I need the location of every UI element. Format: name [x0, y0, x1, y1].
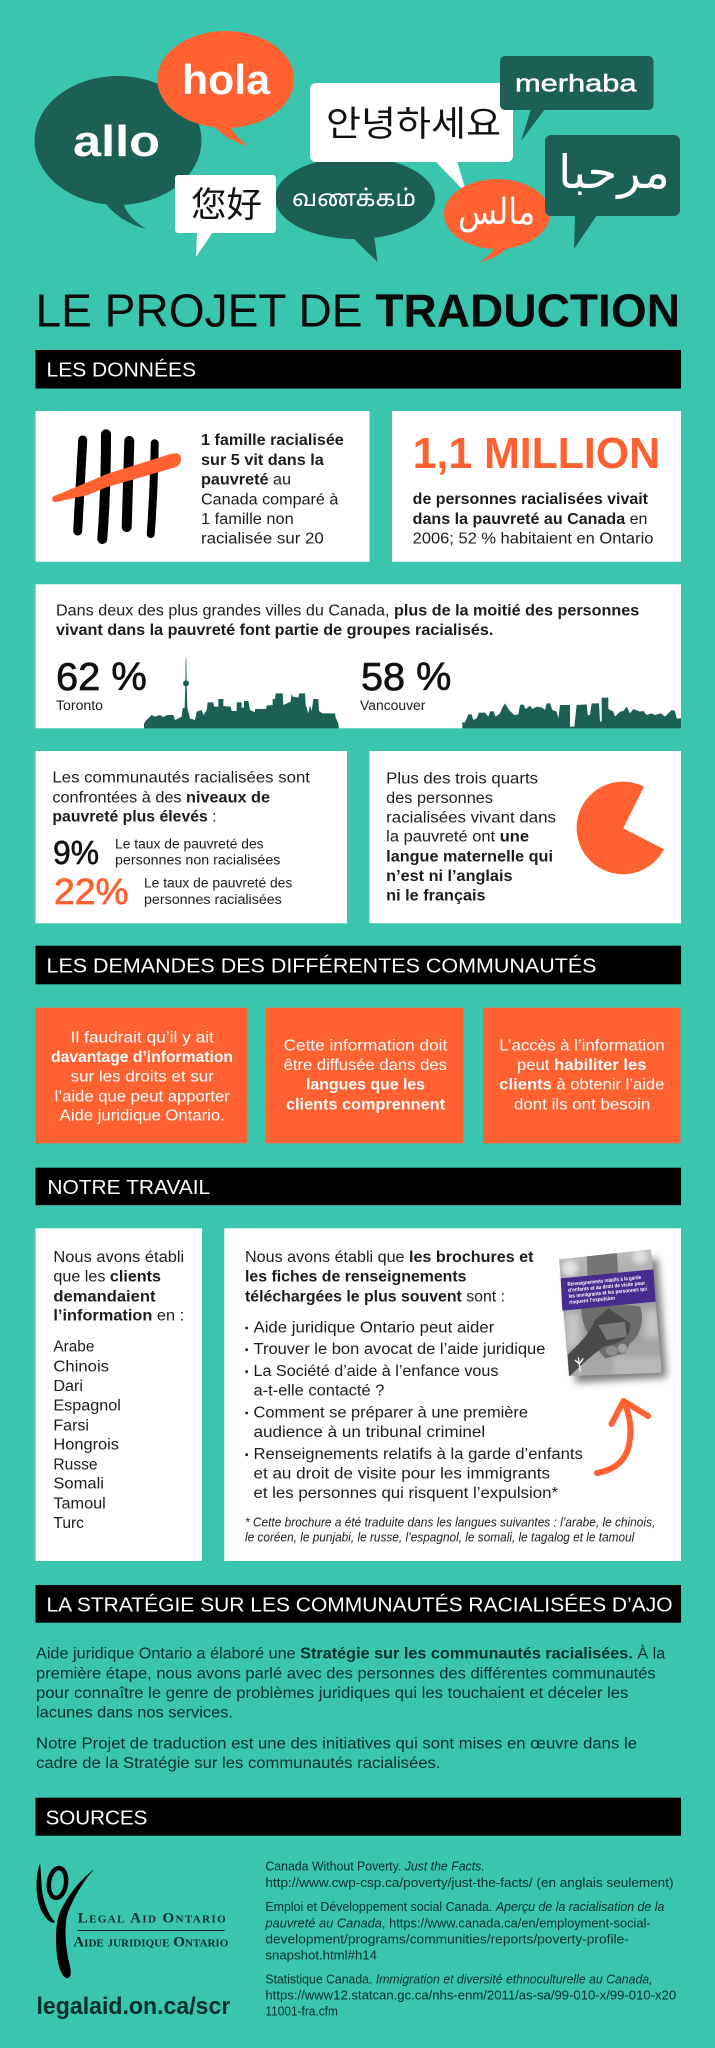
source 2: pauvreté au Canada , https://www.canada.ca/en/employment-social- [264, 1916, 651, 1930]
list: brochures: et les personnes qui risquent l’expulsion* [254, 1485, 558, 1502]
list: brochures: Trouver le bon avocat de l’aide juridique [254, 1341, 545, 1358]
text: 1 famille sur 5: racialisée sur 20 [201, 530, 324, 547]
text: langue maternelle [386, 770, 556, 905]
bubble: merhaba: merhaba [515, 70, 637, 98]
bubble: merhaba [500, 56, 654, 141]
skyline: toronto [144, 658, 339, 728]
panel: davantage d'information: davantage d’information [51, 1049, 233, 1066]
text: stratégie paragraph 1: lacunes dans nos services. [36, 1704, 233, 1721]
bubble: dark arabic [545, 135, 680, 249]
panel: langues demandées [36, 1228, 202, 1561]
source 1: http://www.cwp-csp.ca/poverty/just-the-facts/ (en anglais seulement) [265, 1876, 674, 1890]
panel: davantage d'information [36, 1008, 247, 1143]
source 2: development/programs/communities/reports/poverty-profile- [265, 1933, 629, 1947]
text: stratégie paragraph 2: Notre Projet de traduction est une des initiatives qui sont mises en œuvre dans le [36, 1736, 637, 1753]
text: clients demandaient: Nous avons établi [53, 1249, 184, 1266]
bubble: korean [310, 83, 513, 194]
text: personnes racialisées [413, 491, 653, 547]
website url: legalaid.on.ca/scr [36, 1993, 230, 2020]
bubble: allo [34, 76, 202, 229]
list: langues: Dari [53, 1378, 83, 1395]
list: brochures: Aide juridique Ontario peut aider [254, 1319, 494, 1336]
list: brochures: a-t-elle contacté ? [254, 1383, 385, 1400]
logo: legal aid ontario [37, 1863, 229, 1978]
text: grandes villes [56, 603, 639, 639]
source 3: 11001-fra.cfm [265, 2005, 338, 2019]
list: brochures: La Société d’aide à l’enfance vous [254, 1363, 499, 1380]
text: personnes racialisées: 2006; 52 % habitaient en Ontario [413, 530, 653, 547]
section heading: sources [36, 1798, 681, 1836]
stat: 22%: Le taux de pauvreté des [144, 876, 293, 891]
logo text: Legal Aid Ontario [78, 1910, 226, 1926]
chart: pie [577, 782, 664, 874]
text: stratégie paragraph 1: première étape, nous avons parlé avec des personnes des différentes communautés [36, 1665, 656, 1682]
stat: 22% [54, 871, 293, 912]
source 3: https://www12.statcan.gc.ca/nhs-enm/2011/as-sa/99-010-x/99-010-x20 [265, 1989, 676, 2003]
text: langue maternelle: Plus des trois quarts [386, 770, 538, 787]
brochure cover: Renseignements relatifs à la garde [567, 1275, 642, 1288]
big number: 1,1 MILLION [413, 429, 660, 478]
text: personnes racialisées: de personnes racialisées vivait [413, 491, 648, 508]
stat: vancouver: 58 % [361, 656, 451, 699]
section heading: les données [36, 350, 681, 388]
list: langues: Arabe [53, 1339, 94, 1356]
text: brochures intro: les fiches de renseignements [245, 1269, 466, 1286]
text: grandes villes: Dans deux des plus grandes villes du Canada, plus de la moitié des personnes [56, 603, 639, 620]
speech bubbles illustration [34, 31, 680, 262]
stat: 22%: personnes racialisées [144, 892, 282, 907]
stat: toronto: Toronto [56, 698, 103, 713]
panel: langues: Cette information doit [284, 1038, 448, 1055]
footnote: le coréen, le punjabi, le russe, l’espagnol, le somali, le tagalog et le tamoul [245, 1531, 635, 1545]
brochure cover: les immigrants et les personnes qui [568, 1286, 648, 1300]
stat: vancouver: Vancouver [360, 698, 426, 713]
arrow [597, 1401, 648, 1473]
skyline: vancouver [462, 698, 681, 728]
list: langues: Hongrois [53, 1437, 119, 1454]
list: brochures: Comment se préparer à une première [254, 1404, 528, 1421]
panel: 1,1 million [392, 411, 681, 562]
panel: 1 famille sur 5 [36, 411, 370, 562]
icon: figure [37, 1863, 94, 1978]
brochure cover [559, 1249, 667, 1383]
logo text [73, 1910, 229, 1951]
section heading: sources: SOURCES [46, 1806, 147, 1829]
section heading: notre travail [36, 1168, 681, 1205]
section heading: la stratégie [36, 1585, 681, 1623]
logo text: Aide juridique Ontario [73, 1935, 229, 1951]
section heading: les données: LES DONNÉES [46, 359, 196, 382]
footnote [245, 1515, 655, 1545]
list: brochures: Renseignements relatifs à la garde d’enfants [254, 1446, 583, 1463]
text: langue maternelle: langue maternelle qui [386, 848, 553, 865]
text: niveaux de pauvreté: Les communautés racialisées sont [52, 770, 311, 787]
text: clients demandaient: demandaient [53, 1288, 156, 1305]
text: stratégie paragraph 2 [36, 1736, 637, 1772]
panel: davantage d'information: l’aide que peut apporter [55, 1088, 230, 1105]
bubble: orange arabic: مالس [458, 192, 535, 233]
list: langues: Tamoul [53, 1495, 106, 1512]
source 1 [265, 1860, 674, 1890]
list: langues: Chinois [53, 1358, 109, 1375]
source 3 [265, 1973, 676, 2019]
panel: grandes villes [36, 584, 681, 728]
panel: niveaux de pauvreté [36, 751, 347, 923]
text: grandes villes: vivant dans la pauvreté font partie de groupes racialisés. [56, 622, 493, 639]
text: langue maternelle: ni le français [386, 888, 486, 905]
bubble: allo: allo [73, 117, 160, 166]
list: langues: Espagnol [53, 1397, 121, 1414]
panel: langues: clients comprennent [286, 1096, 445, 1113]
text: clients demandaient [53, 1249, 184, 1325]
source 2 [264, 1900, 664, 1962]
brochure cover: risquent l’expulsion [569, 1296, 615, 1306]
text: stratégie paragraph 1 [36, 1646, 666, 1721]
bubble: chinese: 您好 [191, 186, 262, 225]
bubble: tamil [275, 157, 435, 262]
stat: 22%: 22% [54, 871, 129, 912]
panel: habiliter les clients: dont ils ont besoin [514, 1096, 650, 1113]
panel: brochures [224, 1228, 681, 1561]
brochure cover: d’enfants et au droit de visite pour [568, 1281, 645, 1294]
bubble: hola: hola [182, 56, 271, 103]
text: stratégie paragraph 2: cadre de la Stratégie sur les communautés racialisées. [36, 1755, 440, 1772]
section heading: la stratégie: LA STRATÉGIE SUR LES COMMUNAUTÉS RACIALISÉES D’AJO [46, 1593, 673, 1616]
stat: 9% [53, 834, 281, 871]
title: LE PROJET DE TRADUCTION [36, 284, 680, 336]
list: langues: Turc [53, 1515, 84, 1532]
panel: davantage d'information: Il faudrait qu’il y ait [71, 1030, 215, 1047]
list: langues: Farsi [53, 1417, 89, 1434]
stat: 9%: Le taux de pauvreté des [115, 837, 264, 852]
list: brochures: et au droit de visite pour les immigrants [254, 1465, 550, 1482]
text: 1 famille sur 5: pauvreté au [201, 472, 291, 489]
list: langues: Somali [53, 1476, 104, 1493]
text: stratégie paragraph 1: pour connaître le genre de problèmes juridiques qui les touchaient et déceler les [36, 1685, 629, 1702]
text: clients demandaient: que les clients [53, 1269, 161, 1286]
source 1: Canada Without Poverty. Just the Facts. [265, 1860, 485, 1874]
bubble: korean: 안녕하세요 [326, 105, 501, 144]
text: langue maternelle: la pauvreté ont une [386, 829, 529, 846]
panel: habiliter les clients: peut habiliter les [517, 1057, 647, 1074]
panel: habiliter les clients: L’accès à l’information [499, 1038, 665, 1055]
bubble: hola [157, 31, 294, 146]
panel: davantage d'information: Aide juridique Ontario. [60, 1108, 225, 1125]
text: niveaux de pauvreté [52, 770, 311, 826]
text: langue maternelle: des personnes [386, 790, 493, 807]
source 2: snapshot.html#h14 [265, 1948, 377, 1962]
panel: habiliter les clients: clients à obtenir l’aide [499, 1077, 664, 1094]
text: personnes racialisées: dans la pauvreté au Canada en [413, 511, 648, 528]
bubble: dark arabic: مرحبا [558, 145, 670, 200]
bubble: tamil: வணக்கம் [292, 186, 416, 215]
list: brochures: audience à un tribunal criminel [254, 1424, 485, 1441]
icon: tally marks [52, 434, 181, 539]
panel: habiliter les clients [483, 1008, 680, 1143]
text: 1 famille sur 5: Canada comparé à [201, 491, 339, 508]
panel: langues: langues que les [306, 1077, 425, 1094]
text: 1 famille sur 5: 1 famille non [201, 511, 294, 528]
text: brochures intro: Nous avons établi que les brochures et [245, 1249, 534, 1266]
text: brochures intro: téléchargées le plus souvent sont : [245, 1288, 505, 1305]
section heading: notre travail: NOTRE TRAVAIL [47, 1176, 210, 1199]
text: niveaux de pauvreté: pauvreté plus élevés : [52, 809, 217, 826]
text: brochures intro [245, 1249, 534, 1305]
stat: 9%: 9% [53, 834, 99, 871]
panel: langues: être diffusée dans des [284, 1057, 447, 1074]
text: langue maternelle: n’est ni l’anglais [386, 868, 512, 885]
text: 1 famille sur 5 [201, 432, 344, 547]
panel: langue maternelle [369, 751, 681, 923]
text: stratégie paragraph 1: Aide juridique Ontario a élaboré une Stratégie sur les communautés racialisées. À la [36, 1646, 666, 1663]
sources list [264, 1860, 676, 2019]
text: langue maternelle: racialisées vivant dans [386, 809, 556, 826]
list: langues [53, 1339, 121, 1532]
source 2: Emploi et Développement social Canada. Aperçu de la racialisation de la [265, 1900, 664, 1914]
source 3: Statistique Canada. Immigration et diversité ethnoculturelle au Canada, [265, 1973, 652, 1987]
text: 1 famille sur 5: sur 5 vit dans la [201, 452, 324, 469]
panel: davantage d'information: sur les droits et sur [71, 1069, 214, 1086]
footnote: * Cette brochure a été traduite dans les langues suivantes : l’arabe, le chinois, [245, 1515, 655, 1529]
text: niveaux de pauvreté: confrontées à des niveaux de [52, 789, 270, 806]
list: brochures [245, 1319, 583, 1502]
section heading: les demandes: LES DEMANDES DES DIFFÉRENTES COMMUNAUTÉS [46, 954, 597, 977]
text: clients demandaient: l’information en : [53, 1308, 184, 1325]
list: langues: Russe [53, 1456, 98, 1473]
bubble: orange arabic [444, 179, 550, 262]
text: 1 famille sur 5: 1 famille racialisée [201, 432, 344, 449]
panel: langues [265, 1008, 463, 1143]
stat: 9%: personnes non racialisées [115, 853, 281, 868]
bubble: chinese [175, 175, 276, 257]
stat: toronto: 62 % [56, 656, 147, 699]
section heading: les demandes [36, 946, 681, 984]
